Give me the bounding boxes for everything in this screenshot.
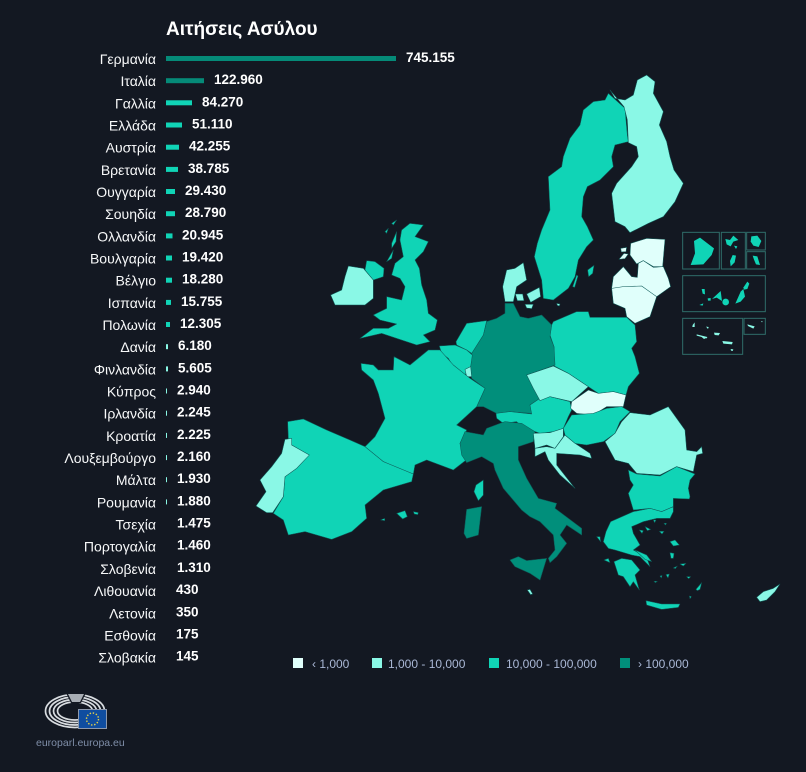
northern Europe countries <box>503 75 683 323</box>
row: Estonia <box>104 626 199 643</box>
country: Italy <box>460 422 582 563</box>
country: Luxembourg <box>465 367 472 377</box>
row: Ireland: Ιρλανδία <box>104 406 156 422</box>
row: Slovakia: 145 <box>176 649 199 664</box>
Great Britain and Northern Ireland <box>360 220 437 345</box>
row: Italy: 122.960 <box>214 72 263 87</box>
logo: European Parliament <box>36 693 125 749</box>
inset: Canary Islands <box>683 276 765 312</box>
country: Poland <box>550 312 639 395</box>
row: Greece <box>109 116 233 134</box>
island: Malta <box>527 589 533 595</box>
south-west Europe countries <box>256 350 485 539</box>
row: Italy: Ιταλία <box>120 73 156 89</box>
row: Latvia: 350 <box>176 604 199 619</box>
row: Ireland <box>104 405 211 422</box>
row: Netherlands <box>97 227 224 244</box>
row: Germany: Γερμανία <box>100 51 156 67</box>
row: Romania: 1.880 <box>177 493 211 508</box>
country: Netherlands <box>456 321 487 353</box>
row: Ireland: 2.245 <box>177 405 211 420</box>
row: Austria: 42.255 <box>189 139 231 154</box>
row: Luxembourg <box>64 449 211 466</box>
row: Austria: Αυστρία <box>106 140 156 156</box>
country: Finland <box>610 75 683 233</box>
country: Czechia <box>527 366 588 402</box>
row: Luxembourg: Λουξεμβούργο <box>64 450 156 466</box>
legend item: over 100,000: › 100,000 <box>638 657 689 671</box>
row: Slovenia: Σλοβενία <box>100 561 156 577</box>
row: Bulgaria <box>90 250 223 266</box>
Greek islands <box>597 520 702 609</box>
country: Estonia <box>619 238 665 267</box>
row: Malta <box>116 471 211 488</box>
row: Malta: Μάλτα <box>116 472 156 488</box>
row: Romania <box>97 493 211 510</box>
island: Sardinia <box>464 507 482 538</box>
island: Öland <box>573 275 578 287</box>
row: Portugal <box>84 538 211 555</box>
row: Bulgaria: 19.420 <box>182 250 223 264</box>
inset: French Guiana <box>683 232 719 269</box>
inset: Réunion <box>747 252 765 269</box>
row: Finland <box>94 360 212 377</box>
row: Lithuania: 430 <box>176 582 199 597</box>
row: Slovakia <box>98 649 199 666</box>
row: Germany <box>100 50 455 67</box>
country: Sweden <box>534 93 628 300</box>
country: Ireland <box>331 266 373 305</box>
country: Slovenia <box>533 428 563 448</box>
country: Belgium <box>439 345 472 375</box>
row: Spain: Ισπανία <box>108 295 156 311</box>
western and central Europe countries <box>331 266 639 433</box>
row: Greece: 51.110 <box>192 116 233 132</box>
row: Denmark <box>120 338 212 355</box>
row: Belgium: Βέλγιο <box>116 273 156 289</box>
icon: hemicycle <box>46 693 104 728</box>
row: Poland: Πολωνία <box>102 317 156 333</box>
row: Germany: 745.155 <box>406 50 455 65</box>
inset boxes: overseas territories <box>683 232 765 354</box>
row: Portugal: 1.460 <box>177 538 211 553</box>
inset: Guadeloupe and Martinique <box>721 232 745 269</box>
island: Sicily <box>510 557 547 580</box>
row: Czechia: Τσεχία <box>116 517 156 533</box>
row: Croatia <box>106 427 211 444</box>
country: Portugal <box>256 438 309 513</box>
legend <box>293 657 689 671</box>
legend item: 1,000 to 10,000: 1,000 - 10,000 <box>388 657 466 671</box>
row: Hungary: 29.430 <box>185 183 226 198</box>
row: Hungary <box>96 183 226 200</box>
south-east Europe countries <box>563 407 780 602</box>
row: Estonia: 175 <box>176 626 199 641</box>
title: Αιτήσεις Ασύλου <box>166 19 318 40</box>
choropleth map of the EU <box>256 75 780 609</box>
row: Slovenia <box>100 560 211 577</box>
row: Netherlands: 20.945 <box>182 227 224 242</box>
country: Austria <box>496 397 572 433</box>
row: UK <box>101 161 230 178</box>
row: Czechia <box>116 516 211 533</box>
row: Romania: Ρουμανία <box>97 494 156 510</box>
row: UK: Βρετανία <box>101 162 156 178</box>
inset: Mayotte <box>747 232 765 250</box>
country: Denmark <box>503 263 541 309</box>
row: Hungary: Ουγγαρία <box>96 184 156 200</box>
row: Belgium: 18.280 <box>182 272 223 287</box>
row: Portugal: Πορτογαλία <box>84 539 156 555</box>
row: Poland <box>102 316 222 333</box>
row: Lithuania <box>94 582 199 599</box>
country: Croatia <box>535 435 592 488</box>
country: Spain <box>273 419 413 539</box>
row: Croatia: 2.225 <box>177 427 211 442</box>
country: UK <box>360 220 437 345</box>
row: Slovenia: 1.310 <box>177 560 211 575</box>
row: Poland: 12.305 <box>180 316 222 331</box>
row: Estonia: Εσθονία <box>104 627 156 643</box>
island: Gotland <box>588 265 594 277</box>
country: Romania <box>605 407 703 475</box>
row: Luxembourg: 2.160 <box>177 449 211 464</box>
island: Corsica <box>474 480 483 501</box>
country: Bulgaria <box>628 467 695 512</box>
row: Austria <box>106 139 231 156</box>
country: France <box>361 350 485 474</box>
row: Finland: Φινλανδία <box>94 361 156 377</box>
row: Belgium <box>116 272 223 289</box>
row: Sweden: 28.790 <box>185 205 226 220</box>
row: Denmark: Δανία <box>120 339 156 355</box>
legend item: 10,000 to 100,000: 10,000 - 100,000 <box>506 657 597 671</box>
islands: Balearics <box>381 511 418 521</box>
bar chart: asylum applications by country <box>64 50 455 666</box>
row: Cyprus: Κύπρος <box>107 384 156 400</box>
inset: Azores <box>683 318 743 354</box>
country: Germany <box>470 303 555 413</box>
row: Lithuania: Λιθουανία <box>94 583 156 599</box>
row: Bulgaria: Βουλγαρία <box>90 250 156 266</box>
row: Cyprus <box>107 382 211 400</box>
row: Spain: 15.755 <box>181 294 223 309</box>
icon: EU flag <box>78 710 106 728</box>
legend item: under 1,000 <box>293 657 350 671</box>
row: Finland: 5.605 <box>178 360 212 375</box>
country: Greece mainland <box>603 507 673 590</box>
row: Malta: 1.930 <box>177 471 211 486</box>
website text: europarl.europa.eu <box>36 737 125 749</box>
legend item: under 1,000: ‹ 1,000 <box>312 657 350 671</box>
country: Hungary <box>563 407 630 445</box>
row: Spain <box>108 294 223 311</box>
row: Denmark: 6.180 <box>178 338 212 353</box>
row: Sweden <box>105 205 226 222</box>
row: Slovakia: Σλοβακία <box>98 650 156 666</box>
row: Netherlands: Ολλανδία <box>97 228 156 244</box>
country: Slovakia <box>571 390 626 415</box>
row: UK: 38.785 <box>188 161 230 176</box>
row: Greece: Ελλάδα <box>109 118 156 134</box>
row: Latvia: Λετονία <box>109 605 156 621</box>
country: Cyprus <box>757 584 780 602</box>
row: Croatia: Κροατία <box>106 428 156 444</box>
country: Latvia <box>612 261 671 297</box>
inset: Madeira <box>744 318 765 334</box>
country: Lithuania <box>612 286 657 323</box>
row: Cyprus: 2.940 <box>177 382 211 398</box>
island: Bornholm <box>557 303 560 306</box>
row: France: Γαλλία <box>115 95 156 111</box>
Italy, Slovenia and Croatia <box>460 422 592 595</box>
row: France <box>115 94 243 111</box>
row: Czechia: 1.475 <box>177 516 211 531</box>
row: Italy <box>120 72 263 89</box>
row: France: 84.270 <box>202 94 243 109</box>
row: Sweden: Σουηδία <box>105 206 156 222</box>
row: Latvia <box>109 604 199 621</box>
